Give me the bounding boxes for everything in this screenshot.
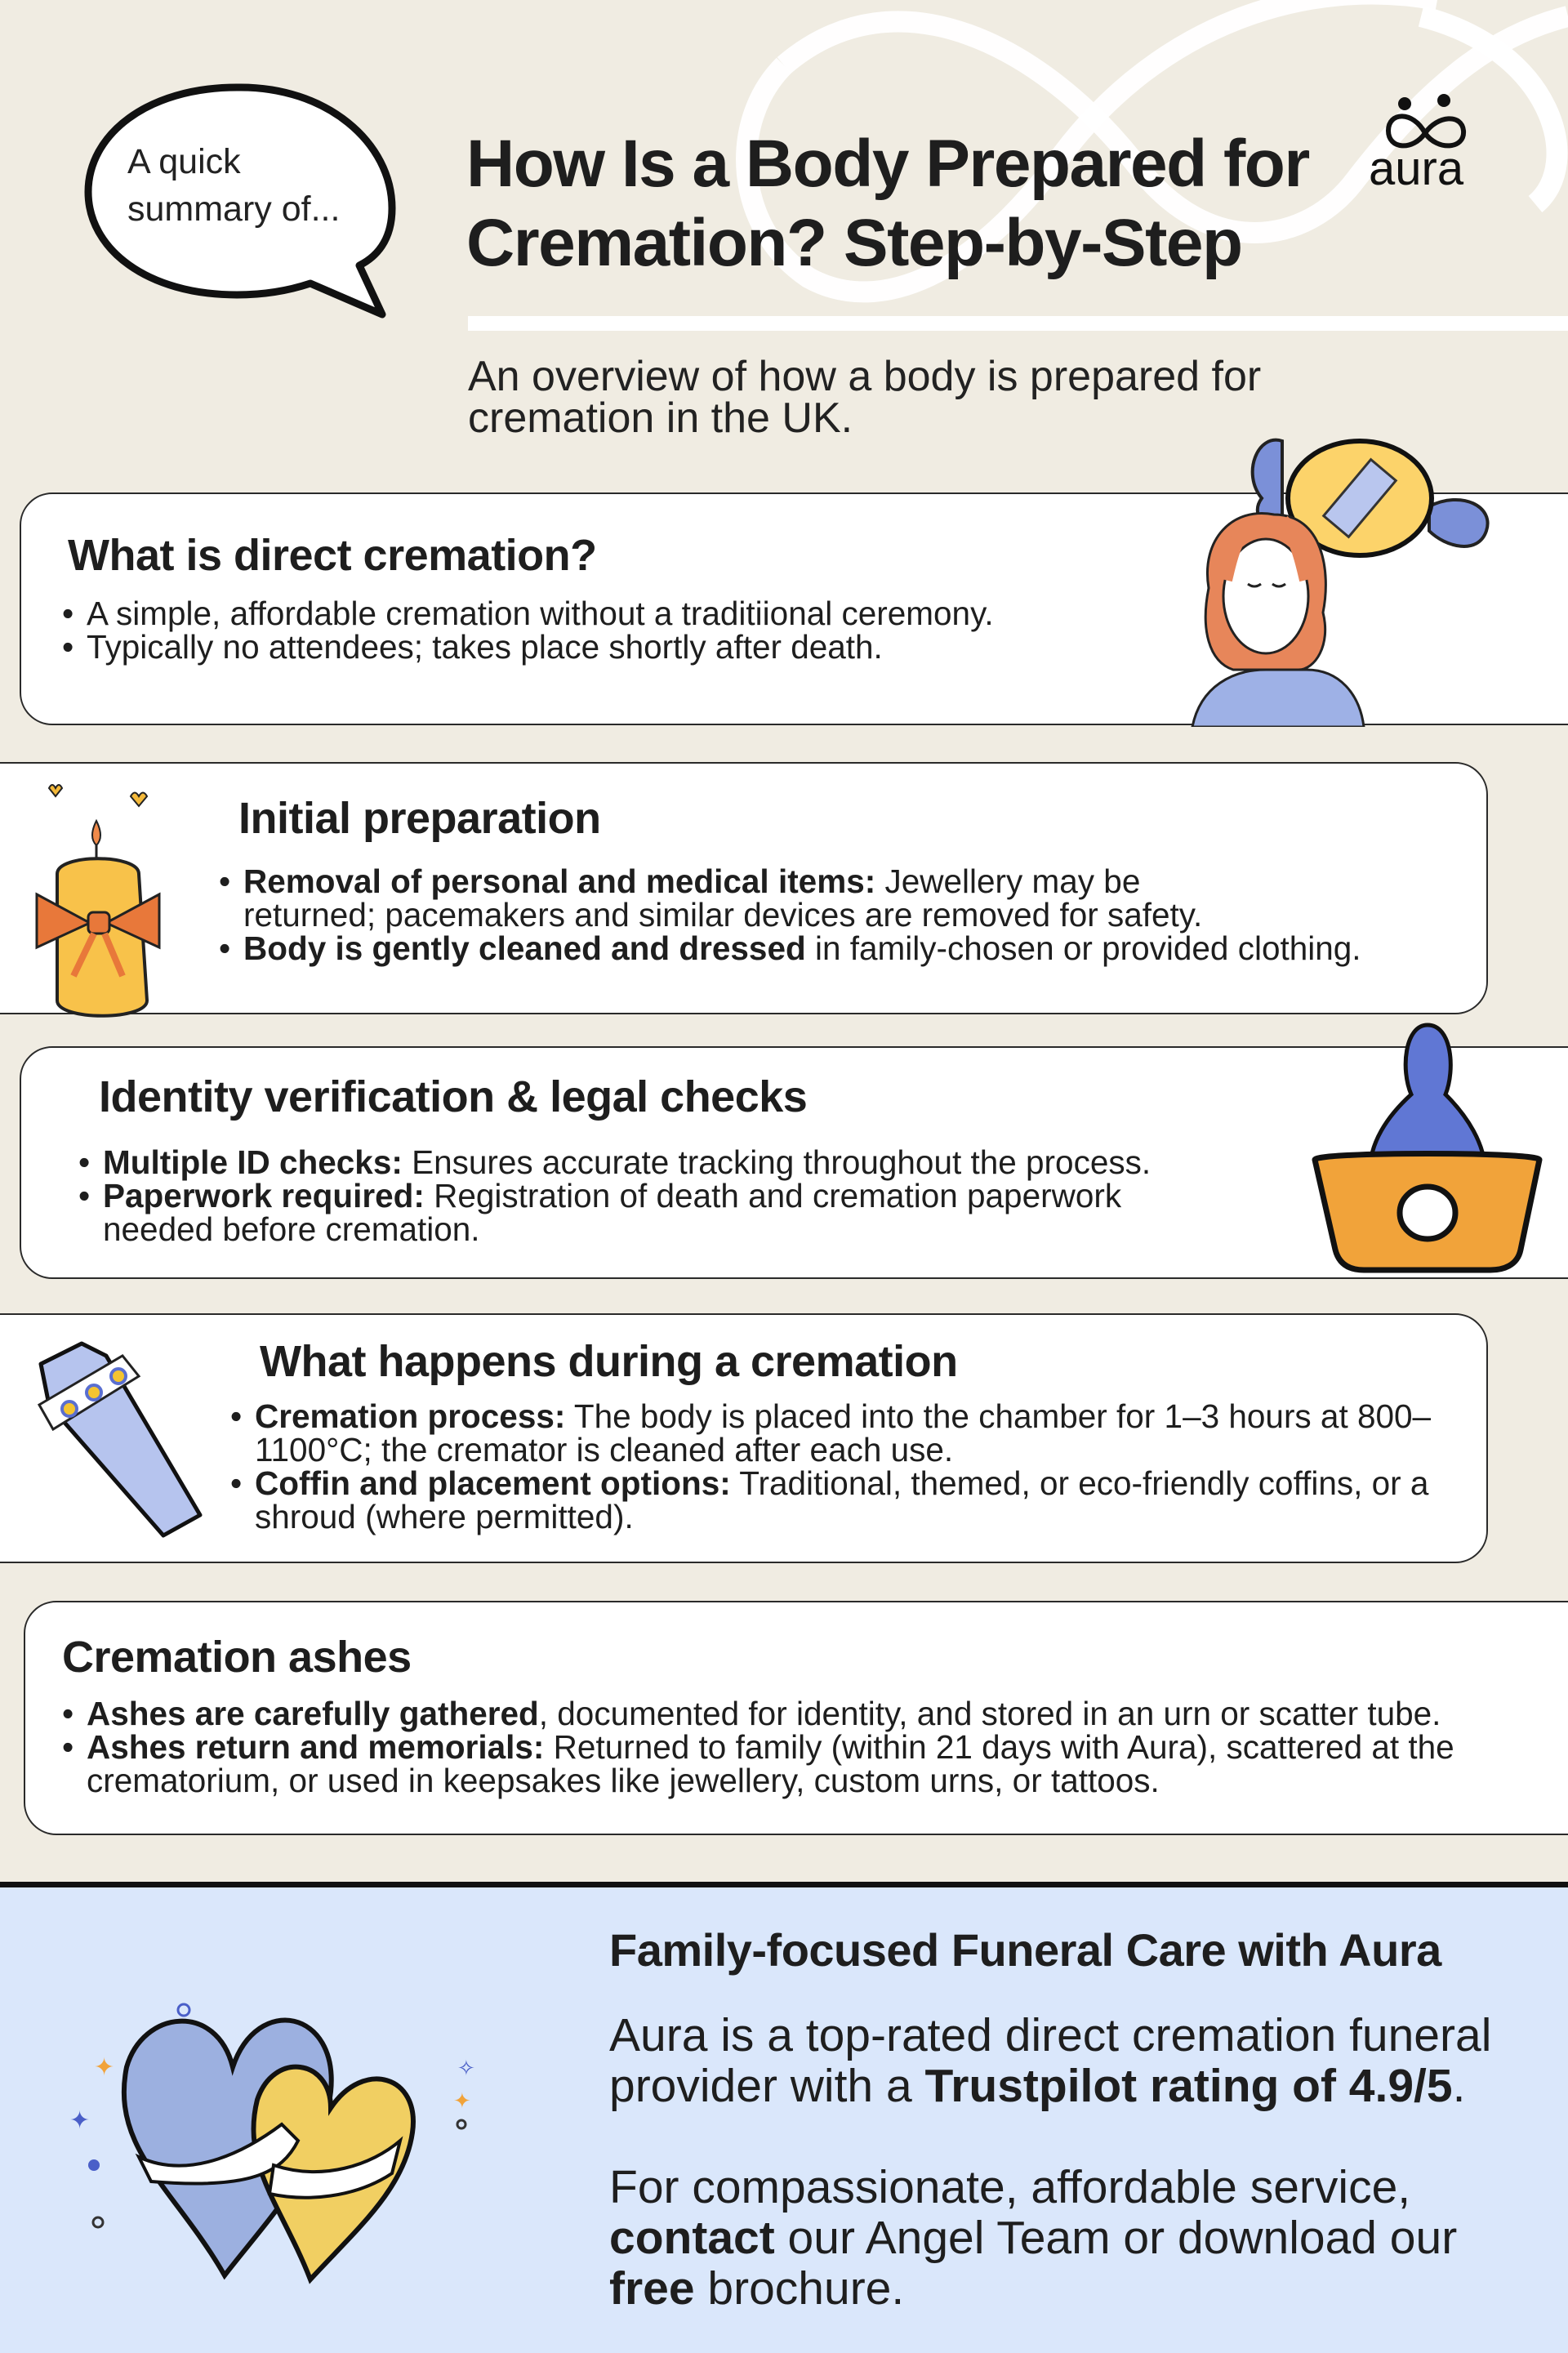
icon: hugging hearts bbox=[69, 2003, 475, 2284]
panel: what is direct cremation bbox=[20, 492, 1568, 725]
speech bubble bbox=[85, 83, 395, 319]
panel: cremation ashes bbox=[24, 1601, 1568, 1835]
bullets: Body is gently cleaned and dressed in family-chosen or provided clothing. bbox=[243, 929, 1361, 967]
heading: What is direct cremation? bbox=[68, 531, 597, 580]
bullets bbox=[64, 595, 994, 666]
bullets: shroud (where permitted). bbox=[255, 1498, 634, 1535]
bullets: Removal of personal and medical items: Jewellery may be bbox=[243, 862, 1140, 900]
bullets: A simple, affordable cremation without a traditiional ceremony. bbox=[87, 595, 994, 632]
footer text: Aura is a top-rated direct cremation funeral bbox=[609, 2009, 1491, 2061]
icon: hugging hearts: ✦ bbox=[69, 2107, 90, 2134]
title underline bar bbox=[468, 316, 1568, 331]
bullets: returned; pacemakers and similar devices are removed for safety. bbox=[243, 896, 1202, 934]
subtitle bbox=[468, 353, 1261, 442]
title: Cremation? Step-by-Step bbox=[466, 206, 1242, 280]
footer text bbox=[609, 2009, 1491, 2315]
footer text: For compassionate, affordable service, bbox=[609, 2161, 1410, 2213]
bullets bbox=[220, 862, 1361, 967]
panel: identity verification bbox=[20, 1046, 1568, 1279]
bubble text: summary of... bbox=[127, 189, 340, 229]
panel: what happens during a cremation bbox=[0, 1313, 1488, 1563]
icon: coffin with flowers bbox=[38, 1341, 203, 1538]
heading: Identity verification & legal checks bbox=[99, 1072, 807, 1121]
bubble text bbox=[127, 142, 340, 229]
icon: woman thinking of coffin bbox=[1191, 438, 1490, 727]
icon: candle with bow bbox=[36, 784, 160, 1018]
bubble text: A quick bbox=[127, 142, 241, 181]
subtitle: cremation in the UK. bbox=[468, 394, 853, 442]
heading: Cremation ashes bbox=[62, 1633, 412, 1682]
footer text: free brochure. bbox=[609, 2262, 904, 2315]
heading: Initial preparation bbox=[238, 794, 601, 843]
bullets: Ashes are carefully gathered, documented for identity, and stored in an urn or scatter tube. bbox=[87, 1695, 1441, 1732]
bullets bbox=[80, 1143, 1151, 1248]
decorative infinity swoosh bbox=[736, 0, 1568, 302]
heading: What happens during a cremation bbox=[260, 1337, 958, 1386]
panel: footer aura care bbox=[0, 1882, 1568, 2353]
bullets: Paperwork required: Registration of death and cremation paperwork bbox=[103, 1177, 1121, 1214]
footer text: contact our Angel Team or download our bbox=[609, 2212, 1457, 2264]
subtitle: An overview of how a body is prepared for bbox=[468, 353, 1261, 400]
bullets: Cremation process: The body is placed into the chamber for 1–3 hours at 800– bbox=[255, 1397, 1431, 1435]
bullets: crematorium, or used in keepsakes like jewellery, custom urns, or tattoos. bbox=[87, 1762, 1160, 1799]
bullets: Multiple ID checks: Ensures accurate tracking throughout the process. bbox=[103, 1143, 1151, 1181]
bullets bbox=[64, 1695, 1454, 1799]
bullets: needed before cremation. bbox=[103, 1210, 480, 1248]
panel: initial preparation bbox=[0, 762, 1488, 1014]
icon: hugging hearts: ✦ bbox=[453, 2088, 471, 2113]
bullets: Typically no attendees; takes place shortly after death. bbox=[87, 628, 883, 666]
bullets: Ashes return and memorials: Returned to family (within 21 days with Aura), scattered at the bbox=[87, 1728, 1454, 1766]
icon: urn figure bbox=[1312, 1023, 1542, 1272]
footer heading: Family-focused Funeral Care with Aura bbox=[609, 1924, 1441, 1976]
bullets bbox=[232, 1397, 1431, 1535]
bullets: Coffin and placement options: Traditional, themed, or eco-friendly coffins, or a bbox=[255, 1464, 1428, 1502]
bullets: 1100°C; the cremator is cleaned after each use. bbox=[255, 1431, 953, 1468]
icon: hugging hearts: ✧ bbox=[457, 2056, 475, 2080]
title: How Is a Body Prepared for bbox=[466, 127, 1309, 201]
logo: aura bbox=[1369, 94, 1467, 195]
title bbox=[466, 127, 1310, 280]
icon: hugging hearts: ✦ bbox=[94, 2054, 114, 2081]
footer text: provider with a Trustpilot rating of 4.9/5. bbox=[609, 2060, 1465, 2112]
logo: aura: aura bbox=[1369, 142, 1463, 195]
